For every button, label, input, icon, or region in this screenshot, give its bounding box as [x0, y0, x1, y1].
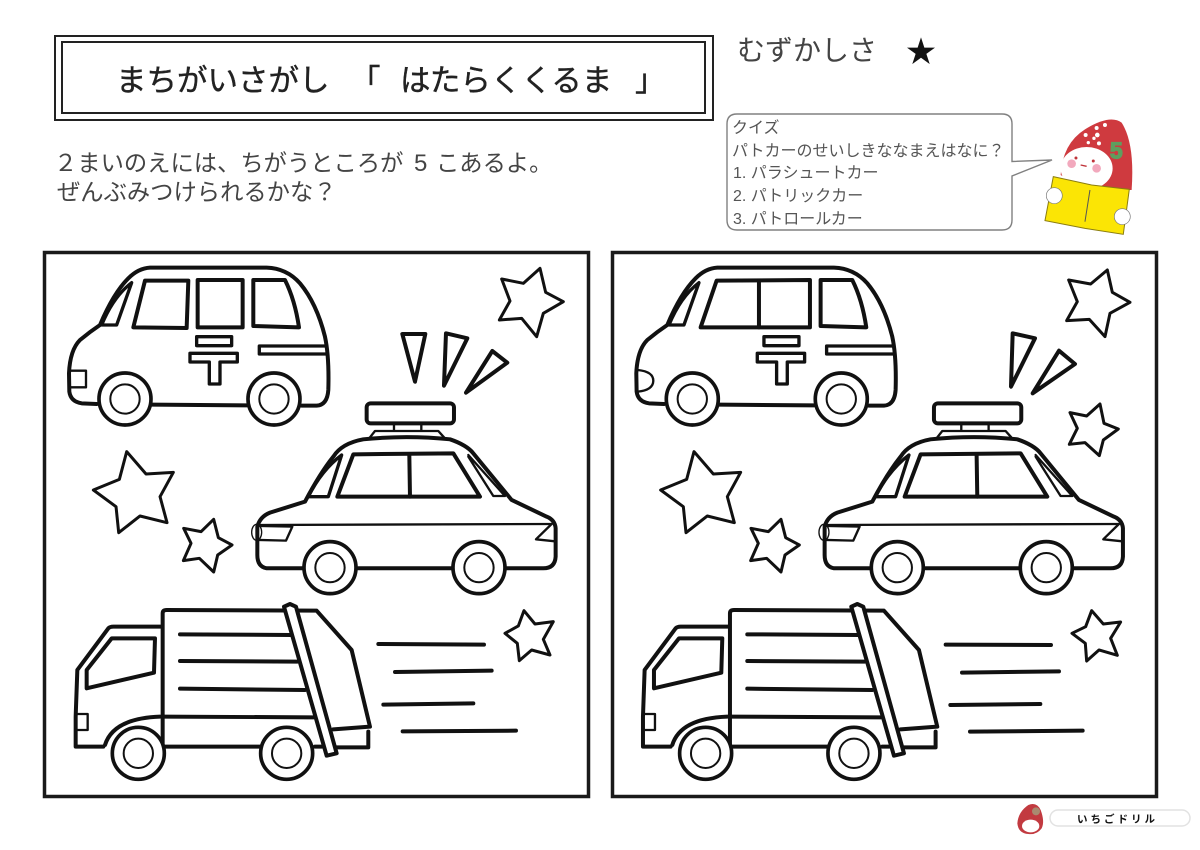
quiz speech bubble: 3. パトロールカー [733, 211, 863, 228]
star: small middle left [183, 519, 232, 572]
quiz speech bubble: 2. パトリックカー [733, 187, 863, 205]
instructions text: ぜんぶみつけられるかな？ [57, 179, 337, 205]
siren flash marks [402, 333, 507, 393]
icon: strawberry character reading a book [1045, 120, 1132, 234]
icon: strawberry character reading a book: 5 [1110, 137, 1123, 163]
garbage truck [643, 604, 937, 779]
panel: left picture [44, 252, 588, 796]
star: bottom right [1072, 611, 1121, 661]
panel: right picture [612, 252, 1156, 796]
star: large middle left [93, 452, 173, 533]
footer logo icon [1017, 804, 1043, 834]
title box: 「 [350, 64, 380, 98]
siren flash marks, two only [1011, 333, 1075, 393]
footer brand label [1050, 810, 1190, 826]
instructions text: こあるよ。 [436, 150, 552, 176]
star: bottom right [505, 611, 553, 661]
instructions text: 5 [414, 150, 427, 177]
quiz speech bubble: クイズ [732, 119, 780, 137]
difficulty label: ★ [906, 36, 936, 69]
police car [819, 403, 1123, 594]
mail van with changed windows and headlight [636, 268, 896, 425]
title box: まちがいさがし [116, 64, 330, 98]
police car [252, 403, 556, 594]
footer brand label: いちごドリル [1077, 812, 1158, 826]
quiz speech bubble: パトカーのせいしきななまえはなに？ [732, 142, 1004, 160]
garbage truck [76, 604, 370, 779]
quiz speech bubble [727, 114, 1052, 230]
star: top right [499, 268, 563, 337]
difficulty label: むずかしさ [737, 35, 877, 66]
title box: はたらくくるま [400, 64, 612, 98]
star: small middle left [751, 519, 799, 572]
speed lines [378, 644, 516, 731]
star: large middle left [661, 452, 741, 533]
quiz speech bubble: 1. パラシュートカー [733, 165, 878, 182]
title box [55, 36, 713, 120]
star: top right [1067, 270, 1130, 337]
title box: 」 [635, 64, 666, 98]
instructions text: ２まいのえには、ちがうところが [54, 150, 403, 176]
star: added beside siren [1069, 404, 1118, 456]
mail van [69, 268, 328, 425]
speed lines [946, 645, 1083, 732]
difficulty label [737, 35, 936, 69]
